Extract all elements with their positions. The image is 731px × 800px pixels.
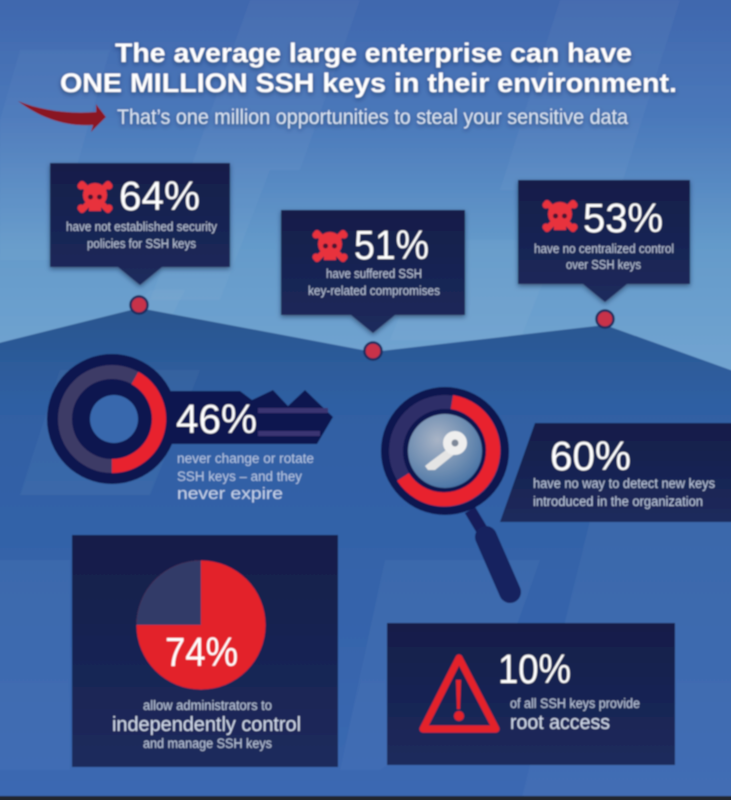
title [60, 38, 677, 98]
stat value: 53% [583, 195, 663, 241]
icon: warning triangle [423, 658, 496, 729]
lower background facets [0, 370, 731, 800]
description: policies for SSH keys [87, 237, 196, 251]
description: SSH keys – and they [177, 469, 302, 484]
description: have no centralized control [534, 242, 674, 256]
panel background [387, 623, 675, 765]
panel: 51% stat [281, 210, 465, 333]
description: allow administrators to [143, 698, 272, 713]
callout box [281, 210, 465, 333]
panel: 60% detect [381, 387, 731, 592]
description [533, 476, 715, 509]
panel background [72, 535, 338, 767]
description: key-related compromises [308, 284, 440, 298]
panel: 10% root access [387, 623, 675, 765]
description: independently control [112, 714, 301, 736]
icon: magnifying glass [381, 387, 510, 592]
icon: silver key [425, 431, 467, 470]
description: have not established security [66, 220, 218, 234]
stat value: 10% [498, 646, 571, 692]
title: The average large enterprise can have [115, 38, 632, 68]
description: have no way to detect new keys [533, 476, 715, 491]
description: never change or rotate [177, 451, 314, 466]
title: ONE MILLION SSH keys in their environment. [60, 68, 677, 98]
description [66, 220, 218, 251]
lower background mountain [0, 308, 731, 800]
bottom strip [0, 796, 731, 800]
description: never expire [177, 484, 283, 503]
description: of all SSH keys provide [510, 696, 640, 711]
stat value: 51% [354, 222, 429, 268]
description [308, 267, 440, 298]
icon: skull [312, 232, 348, 260]
stat value: 64% [119, 173, 200, 219]
callout box [518, 180, 690, 302]
description: have suffered SSH [326, 267, 422, 281]
description: and manage SSH keys [143, 736, 272, 751]
callout box [50, 163, 230, 285]
description: root access [510, 712, 610, 734]
stat value: 60% [550, 433, 631, 479]
description [177, 451, 314, 503]
description: introduced in the organization [533, 494, 703, 509]
description [510, 696, 640, 734]
description [534, 242, 674, 272]
panel: 64% stat [50, 163, 230, 285]
marker dots [130, 296, 614, 360]
subtitle: That’s one million opportunities to steal your sensitive data [117, 106, 628, 129]
pie chart [136, 560, 266, 690]
panel: 53% stat [518, 180, 690, 302]
description [112, 698, 301, 751]
background facets [0, 0, 680, 340]
panel: 46% key [47, 354, 333, 503]
stat value: 46% [176, 396, 257, 442]
panel: 74% pie [72, 535, 338, 767]
text band [500, 423, 731, 522]
icon: skull [542, 202, 578, 230]
icon: key [47, 354, 333, 484]
arrow [18, 101, 106, 132]
description: over SSH keys [566, 258, 641, 272]
background sky [0, 0, 731, 400]
icon: skull [78, 182, 112, 212]
stat value: 74% [165, 629, 238, 675]
